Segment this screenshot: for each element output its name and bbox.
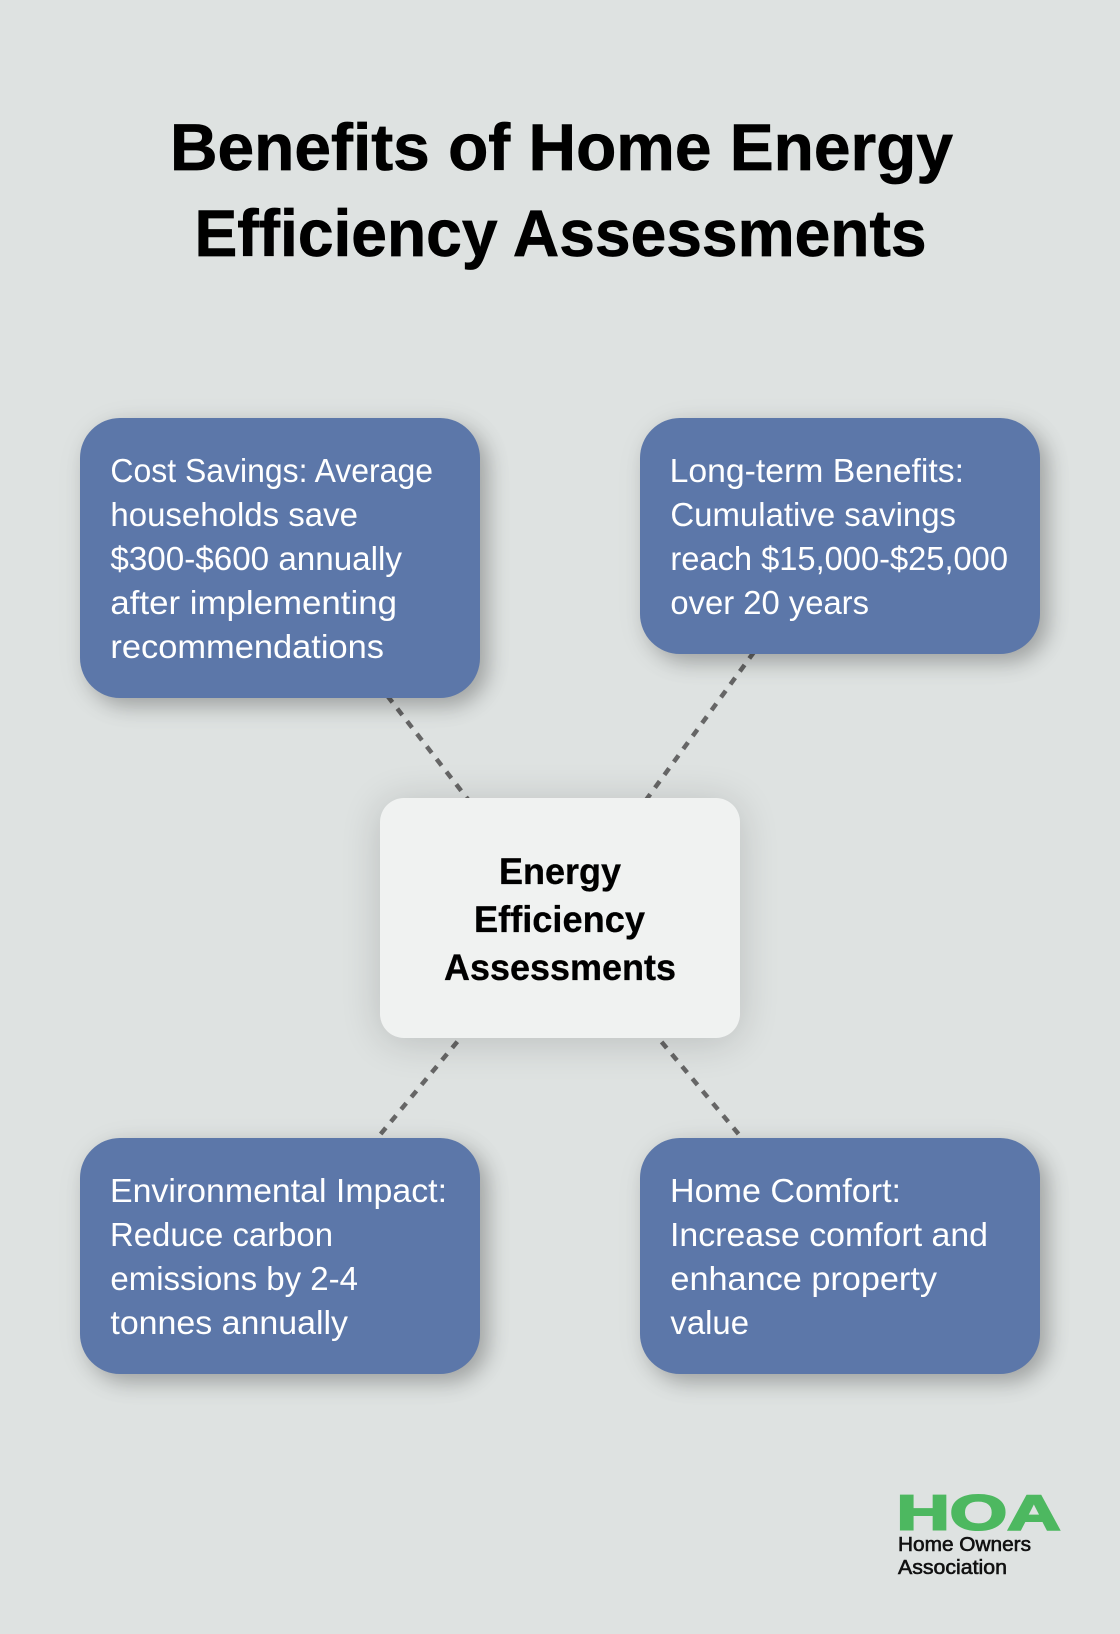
panel: home comfort <box>640 1138 1040 1374</box>
panel: environmental impact: Environmental Impact: <box>110 1172 447 1209</box>
panel: home comfort: enhance property <box>670 1260 938 1297</box>
panel: environmental impact <box>80 1138 480 1374</box>
logo: HOA Home Owners Association: HOA <box>896 1486 1060 1540</box>
panel: home comfort: value <box>670 1304 749 1341</box>
panel: cost savings: households save <box>110 496 358 533</box>
panel: center node: Energy <box>499 851 621 892</box>
panel: center node: Efficiency <box>474 899 645 940</box>
panel: home comfort: Increase comfort and <box>670 1216 988 1253</box>
logo: HOA Home Owners Association: Home Owners <box>898 1534 1031 1556</box>
panel: center node: Assessments <box>444 947 676 988</box>
logo: HOA Home Owners Association: Association <box>898 1557 1007 1579</box>
panel: long-term benefits: Cumulative savings <box>670 496 956 533</box>
panel: long-term benefits: over 20 years <box>670 584 869 621</box>
panel: environmental impact: tonnes annually <box>110 1304 349 1341</box>
title: Efficiency Assessments <box>194 196 926 270</box>
panel: cost savings: after implementing <box>110 584 397 621</box>
panel: long-term benefits: reach $15,000-$25,000 <box>670 540 1008 577</box>
panel: cost savings: recommendations <box>110 628 384 665</box>
panel: cost savings <box>80 418 480 698</box>
panel: home comfort: Home Comfort: <box>670 1172 901 1209</box>
panel: cost savings: $300-$600 annually <box>110 540 402 577</box>
panel: center node <box>380 798 740 1038</box>
panel: environmental impact: emissions by 2-4 <box>110 1260 358 1297</box>
panel: long-term benefits: Long-term Benefits: <box>670 452 964 489</box>
title: Benefits of Home Energy <box>170 110 953 184</box>
panel: cost savings: Cost Savings: Average <box>110 452 433 489</box>
panel: long-term benefits <box>640 418 1040 654</box>
panel: environmental impact: Reduce carbon <box>110 1216 333 1253</box>
